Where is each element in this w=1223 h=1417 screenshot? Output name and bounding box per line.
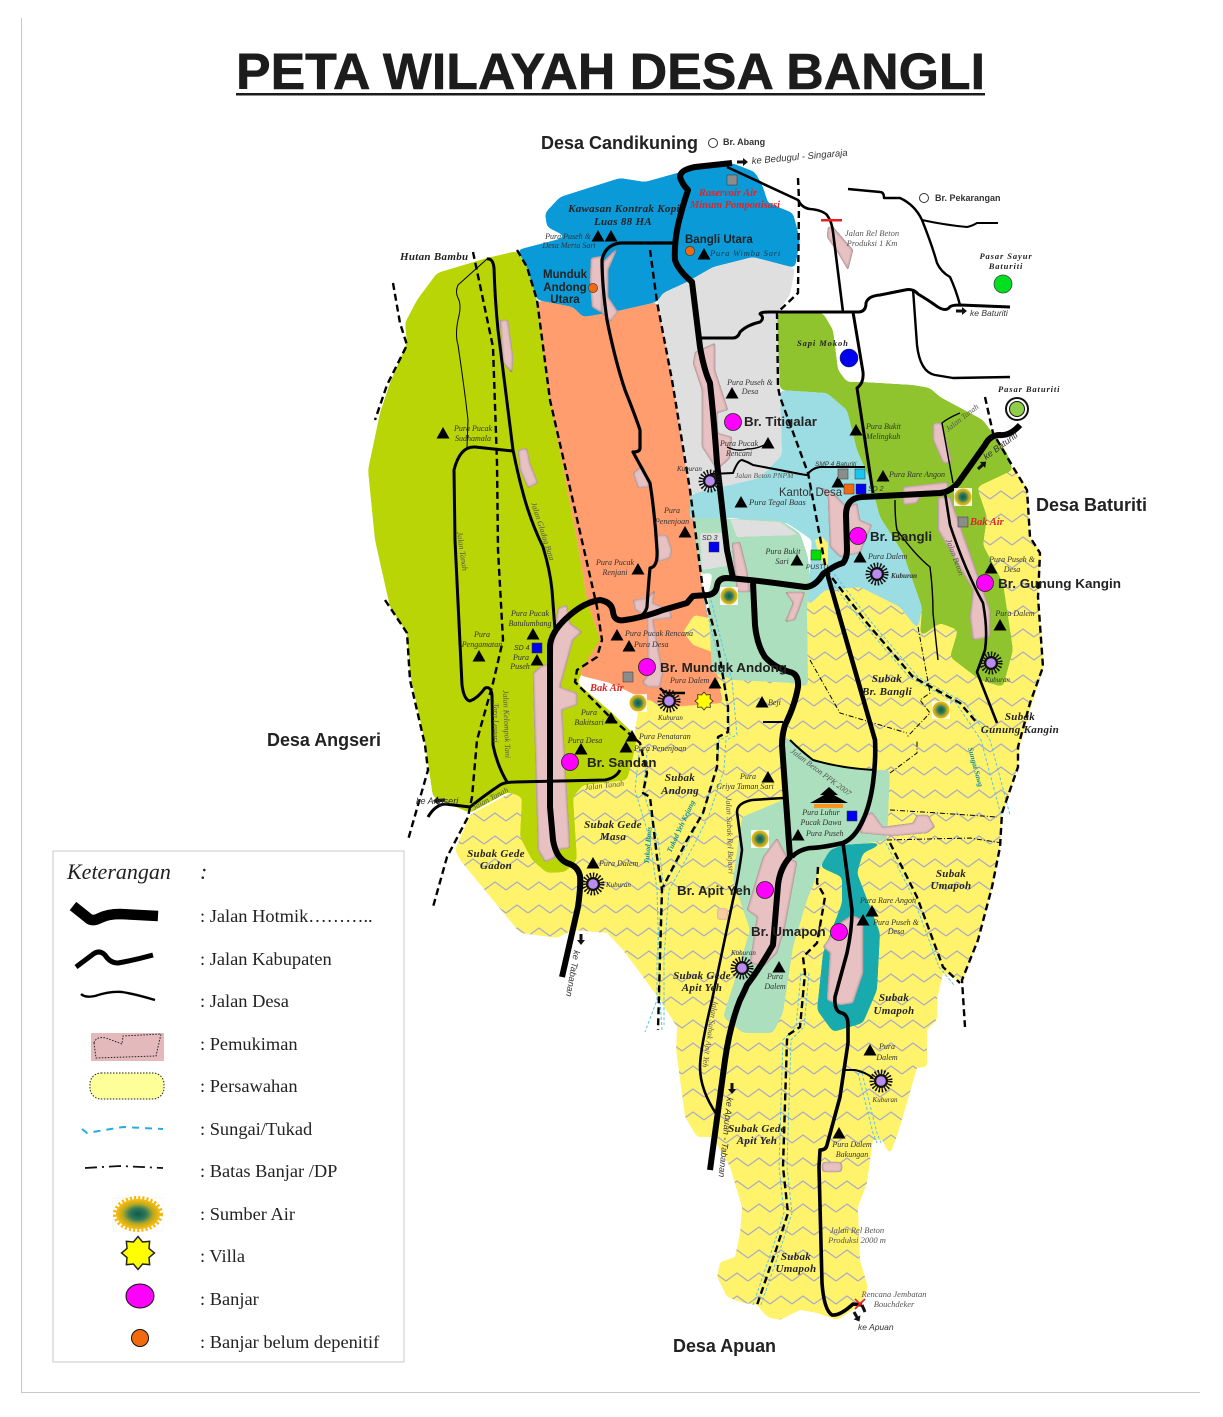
labels: temples and places: Pura Bukit bbox=[765, 547, 801, 556]
labels: temples and places: Pura Pucak bbox=[453, 424, 492, 433]
labels: neighbouring villages: Desa Baturiti bbox=[1036, 494, 1147, 515]
labels: temples and places: Dalem bbox=[763, 982, 786, 991]
labels: banjar names: Br. Pekarangan bbox=[935, 193, 1001, 203]
labels: subak areas: Subak bbox=[879, 992, 909, 1004]
labels: temples and places: Pura bbox=[878, 1042, 895, 1051]
labels: subak areas: Br. Bangli bbox=[861, 686, 913, 698]
labels: temples and places: Desa bbox=[887, 927, 904, 936]
labels: temples and places: Pura bbox=[473, 630, 490, 639]
labels: temples and places: PUSTU bbox=[806, 564, 828, 571]
labels: direction and road names: Jalan Gladag Bata bbox=[529, 501, 556, 562]
labels: red and spaced headings: Sapi Mokoh bbox=[797, 338, 849, 348]
labels: banjar names: Utara bbox=[550, 294, 580, 306]
labels: direction and road names: ke Baturiti bbox=[981, 429, 1020, 462]
labels: direction and road names: Tara Lestari bbox=[491, 703, 500, 742]
legend: jalan desa: : Jalan Desa bbox=[200, 991, 289, 1011]
labels: direction and road names: Jalan Subak Rel Bejasri bbox=[724, 797, 736, 874]
labels: subak areas: Gadon bbox=[480, 860, 512, 872]
labels: direction and road names: Sungai Sawg bbox=[966, 746, 985, 788]
labels: direction and road names: Jalan Kelompok Tani bbox=[501, 690, 512, 758]
labels: subak areas: Subak Gede bbox=[673, 970, 731, 982]
labels: red and spaced headings bbox=[589, 188, 1060, 694]
labels: subak areas: Masa bbox=[599, 831, 626, 843]
region: green Gunung Kangin bbox=[777, 313, 1013, 687]
legend: jalan hotmik bbox=[73, 906, 373, 926]
labels: temples and places: Pura Pucak bbox=[719, 439, 758, 448]
labels: temples and places: Griya Taman Sari bbox=[716, 782, 774, 791]
legend: sumber air: : Sumber Air bbox=[200, 1204, 295, 1224]
labels: temples and places: Desa bbox=[1003, 565, 1020, 574]
markers: red bars, arrows bbox=[433, 158, 989, 1324]
icons: sumber air bbox=[629, 488, 972, 848]
labels: subak areas: Kawasan Kontrak Kopi bbox=[567, 203, 681, 215]
map bbox=[267, 132, 1147, 1356]
icon: Pura Luhur big temple bbox=[810, 787, 848, 808]
labels: temples and places: Bakitsari bbox=[574, 718, 604, 727]
legend: sumber air bbox=[113, 1198, 295, 1231]
labels: temples and places: Rencana Jembatan bbox=[861, 1289, 926, 1299]
labels: temples and places: SD 3 bbox=[702, 535, 718, 542]
labels: temples and places: Pura Puseh & bbox=[726, 378, 774, 387]
region: grey Titigalar bbox=[657, 257, 795, 495]
region: blue Kawasan Kontrak Kopi bbox=[517, 163, 800, 317]
labels: temples and places: Jalan Beton PNPM bbox=[735, 471, 794, 480]
legend: jalan kabupaten bbox=[76, 949, 332, 969]
labels: red and spaced headings: Bak Air bbox=[969, 517, 1005, 528]
legend: villa bbox=[122, 1237, 245, 1269]
icons: named point circles bbox=[708, 138, 1028, 420]
labels: temples and places: Jalan Rel Beton bbox=[830, 1225, 884, 1235]
labels: temples and places: Pura Tegal Baas bbox=[748, 497, 807, 507]
labels: banjar names: Br. Umapoh bbox=[751, 924, 826, 939]
labels: neighbouring villages: Desa Apuan bbox=[673, 1335, 776, 1356]
legend: pemukiman: : Pemukiman bbox=[200, 1034, 298, 1054]
labels: temples and places: Pura bbox=[739, 772, 756, 781]
labels: direction and road names: ke Apuan bbox=[858, 1322, 894, 1332]
labels: direction and road names: Jalan Subak Apit Yeh bbox=[700, 1000, 720, 1068]
labels: temples and places: Pura Puseh bbox=[805, 829, 844, 838]
labels: temples and places: Sari bbox=[775, 557, 789, 566]
labels: red and spaced headings: Baturiti bbox=[988, 261, 1023, 271]
labels: temples and places: Bouchdeker bbox=[874, 1299, 915, 1309]
legend: pemukiman bbox=[91, 1033, 298, 1061]
labels: subak areas: Umapoh bbox=[874, 1005, 914, 1017]
labels: direction and road names: Jalan Tanah bbox=[944, 402, 980, 434]
labels: temples and places: Jalan Rel Beton bbox=[845, 228, 899, 238]
labels: red and spaced headings: Pasar Sayur bbox=[979, 251, 1033, 261]
labels: temples and places: Pucak Dawa bbox=[799, 818, 842, 827]
labels: temples and places bbox=[453, 228, 1036, 1309]
labels: banjar names: Br. Gunung Kangin bbox=[998, 576, 1121, 591]
legend: banjar bbox=[126, 1284, 259, 1309]
legend: jalan desa bbox=[81, 991, 289, 1011]
labels: temples and places: Pura Dalem bbox=[867, 552, 908, 561]
title: PETA WILAYAH DESA BANGLI bbox=[236, 43, 985, 100]
labels: temples and places: Pura Dalem bbox=[831, 1140, 872, 1149]
labels: temples and places: Pura Dalem bbox=[994, 609, 1035, 618]
labels: temples and places: Melingkuh bbox=[865, 432, 900, 441]
icons: facility squares bbox=[532, 175, 968, 821]
labels: temples and places: Bakungan bbox=[836, 1150, 868, 1159]
roads: jalan hotmik bbox=[550, 163, 1020, 1170]
legend: banjar belum depenitif: : Banjar belum depenitif bbox=[200, 1332, 380, 1352]
labels: subak areas: Hutan Bambu bbox=[399, 251, 468, 263]
settlements (pemukiman) bbox=[500, 227, 990, 1172]
labels: neighbouring villages bbox=[267, 132, 1147, 1356]
region: mint upper bbox=[693, 518, 810, 687]
labels: temples and places: SD 2 bbox=[868, 486, 884, 493]
labels: direction and road names: Tukad Baas bbox=[642, 827, 654, 864]
labels: red and spaced headings: Raservoir Air bbox=[698, 188, 758, 199]
labels: temples and places: Rencani bbox=[725, 449, 752, 458]
labels: banjar names: Br. Sandan bbox=[587, 755, 656, 770]
labels: direction and road names: ke Angseri bbox=[416, 796, 459, 806]
labels: banjar names bbox=[543, 137, 1121, 939]
labels: temples and places: Puseh bbox=[509, 662, 530, 671]
labels: banjar names: Br. Munduk Andong bbox=[660, 660, 787, 675]
labels: subak areas: Subak bbox=[1005, 711, 1035, 723]
labels: subak areas: Subak Gede bbox=[584, 819, 642, 831]
icon: villa bbox=[695, 692, 713, 710]
labels: temples and places: Pura bbox=[766, 972, 783, 981]
legend: batas banjar: : Batas Banjar /DP bbox=[200, 1161, 337, 1181]
labels: temples and places: Pura bbox=[663, 506, 680, 515]
icons: banjar bbox=[562, 414, 994, 940]
labels: direction and road names: ke Bedugul - Singaraja bbox=[751, 148, 848, 167]
legend heading: : bbox=[200, 859, 207, 884]
region: rice fields (persawahan) bbox=[455, 468, 1044, 1320]
labels: temples and places: SMP 4 Baturiti bbox=[815, 461, 857, 468]
labels: banjar names: Munduk bbox=[543, 269, 588, 281]
labels: banjar names: Br. Titigalar bbox=[744, 414, 817, 429]
icons: temples bbox=[436, 230, 1006, 1138]
region: teal Umapoh bbox=[817, 842, 887, 1032]
labels: temples and places: Pura Pucak Rencana bbox=[624, 629, 693, 638]
labels: red and spaced headings: Minum Pomponisasi bbox=[689, 200, 780, 211]
boundaries (batas banjar) bbox=[375, 178, 1043, 1305]
labels: red and spaced headings: Pasar Baturiti bbox=[998, 384, 1060, 394]
labels: direction and road names: Jalan Beton PPK 2007 bbox=[789, 746, 854, 798]
labels: temples and places: Pura Penenjoan bbox=[633, 744, 686, 753]
legend: banjar belum depenitif bbox=[132, 1330, 380, 1352]
labels: temples and places: Pura bbox=[512, 653, 529, 662]
labels: banjar names: Bangli Utara bbox=[685, 234, 753, 246]
labels: temples and places: Pura Puseh & bbox=[544, 232, 592, 241]
roads: jalan desa and kabupaten bbox=[428, 167, 1010, 1315]
labels: temples and places: Kuburan bbox=[730, 949, 756, 957]
labels: temples and places: Pura Desa bbox=[633, 640, 668, 649]
labels: subak areas: Gunung Kangin bbox=[981, 724, 1059, 736]
labels: temples and places: Beji bbox=[768, 698, 781, 707]
labels: subak areas: Subak bbox=[872, 673, 902, 685]
labels: subak areas: Andong bbox=[660, 785, 699, 797]
labels: temples and places: Batulumbang bbox=[508, 619, 552, 628]
legend: villa: : Villa bbox=[200, 1246, 245, 1266]
labels: temples and places: Kuburan bbox=[657, 714, 683, 722]
labels: temples and places: SD 4 bbox=[514, 645, 530, 652]
icons: banjar belum depenitif bbox=[588, 246, 695, 293]
labels: subak areas: Subak bbox=[781, 1251, 811, 1263]
labels: temples and places: Pura Penataran bbox=[638, 732, 691, 741]
labels: banjar names: Br. Bangli bbox=[870, 529, 932, 544]
labels: subak areas: Umapoh bbox=[931, 880, 971, 892]
labels: direction and road names bbox=[416, 148, 1020, 1332]
labels: temples and places: Pura Dalem bbox=[598, 859, 639, 868]
labels: temples and places: Produksi 2000 m bbox=[827, 1235, 886, 1245]
labels: subak areas: Umapoh bbox=[776, 1263, 816, 1275]
labels: direction and road names: Tukad Yeh Kejang bbox=[665, 798, 697, 854]
labels: red and spaced headings: Bak Air bbox=[589, 683, 625, 694]
labels: temples and places: Kuburan bbox=[676, 465, 702, 473]
legend: sungai: : Sungai/Tukad bbox=[200, 1119, 312, 1139]
legend: sungai bbox=[82, 1119, 312, 1139]
labels: temples and places: Pura Puseh & bbox=[872, 918, 920, 927]
region: small yellow blob bbox=[815, 537, 828, 567]
labels: temples and places: Pura Dalem bbox=[669, 676, 710, 685]
legend heading: Keterangan bbox=[67, 859, 171, 884]
labels: temples and places: Pengamatan bbox=[461, 640, 502, 649]
labels: subak areas: Subak bbox=[936, 868, 966, 880]
labels: subak areas: Subak bbox=[665, 772, 695, 784]
labels: banjar names: Br. Abang bbox=[723, 137, 765, 147]
labels: temples and places: Pura Rare Angon bbox=[859, 896, 916, 905]
region: mint lower bbox=[723, 735, 890, 1033]
labels: temples and places: Pura Wimba Sari bbox=[709, 248, 781, 258]
labels: temples and places: Penenjoan bbox=[654, 517, 689, 526]
labels: subak areas: Subak Gede bbox=[728, 1123, 786, 1135]
labels: subak areas: Luas 88 HA bbox=[593, 216, 652, 228]
labels: direction and road names: ke Tabanan bbox=[564, 950, 582, 997]
region: orange Munduk Andong bbox=[537, 300, 723, 707]
labels: direction and road names: Jalan Tanah bbox=[455, 531, 469, 571]
region: pale cyan Bangli bbox=[690, 390, 922, 630]
labels: direction and road names: Jalan Tanah bbox=[471, 785, 510, 812]
labels: temples and places: Kuburan bbox=[605, 881, 631, 889]
region: lime green Sandan west bbox=[368, 251, 637, 873]
labels: banjar names: Andong bbox=[543, 282, 587, 294]
labels: subak areas: Apit Yeh bbox=[681, 982, 722, 994]
labels: temples and places: Pura Desa bbox=[567, 736, 602, 745]
labels: temples and places: Desa Merta Sari bbox=[541, 241, 596, 250]
legend: persawahan bbox=[90, 1073, 298, 1099]
legend: keterangan bbox=[53, 851, 404, 1362]
labels: temples and places: Dalem bbox=[875, 1053, 898, 1062]
labels: direction and road names: Jalan Tanah bbox=[584, 779, 624, 792]
labels: temples and places: Desa bbox=[741, 387, 758, 396]
icons: kuburan bbox=[584, 472, 1000, 1090]
labels: subak areas bbox=[399, 203, 1059, 1275]
labels: temples and places: Pura Puseh & bbox=[988, 555, 1036, 564]
labels: temples and places: Pura Pucak bbox=[510, 609, 549, 618]
labels: neighbouring villages: Desa Angseri bbox=[267, 729, 381, 750]
legend: banjar: : Banjar bbox=[200, 1289, 259, 1309]
labels: neighbouring villages: Desa Candikuning bbox=[541, 132, 698, 153]
labels: temples and places: Kantor Desa bbox=[779, 485, 842, 499]
labels: temples and places: Produksi 1 Km bbox=[846, 238, 897, 248]
labels: subak areas: Subak Gede bbox=[467, 848, 525, 860]
labels: temples and places: Pura Pucak bbox=[595, 558, 634, 567]
labels: direction and road names: Jalan Beton bbox=[944, 538, 966, 577]
labels: temples and places: Pura Bukit bbox=[865, 422, 902, 431]
region: small rice field inside Munduk Andong bbox=[683, 615, 720, 655]
labels: temples and places: Kuburan bbox=[872, 1096, 898, 1104]
labels: temples and places: Kuburan bbox=[984, 676, 1010, 684]
legend: jalan hotmik: : Jalan Hotmik……….. bbox=[200, 906, 373, 926]
rivers (sungai) bbox=[635, 570, 1010, 1305]
labels: direction and road names: ke Apuan - Tabanan bbox=[717, 1097, 735, 1178]
legend: jalan kabupaten: : Jalan Kabupaten bbox=[200, 949, 332, 969]
labels: banjar names: Br. Apit Yeh bbox=[677, 883, 751, 898]
labels: temples and places: Sudhamala bbox=[455, 434, 491, 443]
legend: persawahan: : Persawahan bbox=[200, 1076, 298, 1096]
labels: direction and road names: ke Baturiti bbox=[970, 308, 1009, 318]
labels: temples and places: Pura bbox=[580, 708, 597, 717]
region: grey patches bbox=[700, 519, 798, 570]
labels: temples and places: Renjani bbox=[602, 568, 627, 577]
labels: temples and places: Pura Rare Angon bbox=[888, 470, 945, 479]
labels: subak areas: Apit Yeh bbox=[736, 1135, 777, 1147]
labels: temples and places: Kuburan bbox=[890, 572, 917, 580]
labels: temples and places: Pura Luhur bbox=[801, 808, 841, 817]
